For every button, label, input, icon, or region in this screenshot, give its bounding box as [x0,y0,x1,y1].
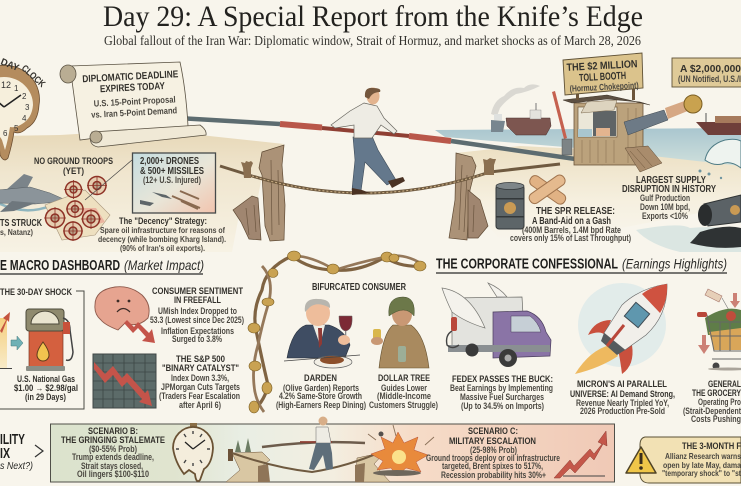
scenario b text [61,426,165,479]
largest supply disruption text [622,175,716,221]
micron caption: Revenue Nearly Tripled YoY, [576,398,669,408]
water splash [698,139,741,179]
micron caption: UNIVERSE: AI Demand Strong, [570,389,675,400]
shoes [352,188,370,195]
window [578,107,617,137]
roof [563,95,650,105]
toll booth [552,88,662,172]
left cliff face [233,145,285,241]
illustration: grocery cart [697,289,741,370]
largest supply disruption text: Gulf Production [640,193,690,203]
scenario b text: Oil lingers $100-$110 [77,469,149,479]
melting clock: 1 [14,84,19,93]
consumer sentiment text [150,286,244,344]
decency strategy text: decency (while bombing Kharg Island). [98,234,226,244]
scroll: diplomatic deadline: EXPIRES TODAY [100,81,165,95]
s&p text: (Traders Fear Escalation [159,391,240,401]
head [366,88,380,104]
icon: teal arrow [11,336,23,350]
heading: macro dashboard: E MACRO DASHBOARD [0,258,120,274]
tankers and smoke [491,84,741,135]
toll booth sign [563,53,643,95]
toll booth sign: (Hormuz Chokepoint) [569,80,639,94]
spr text [510,206,631,243]
scenario c text: Recession probability hits 30%+ [441,470,546,480]
spr text: A Band-Aid on a Gash [532,216,611,227]
scroll: diplomatic deadline [60,62,206,147]
volatility matrix heading [0,432,43,472]
consumer sentiment text: Inflation Expectations [161,326,234,336]
arm paying with coin [624,95,702,135]
s&p text: after April 6) [179,400,221,410]
title: Day 29: A Special Report from the Knife’s Edge [103,0,643,33]
darden caption: 4.2% Same-Store Growth [279,391,362,401]
pump caption [14,374,78,402]
micron caption: MICRON'S AI PARALLEL [577,379,667,390]
micron caption [570,379,675,416]
melting clock: 3 [25,103,30,112]
largest supply disruption text: Exports <10% [642,211,688,221]
jet [0,174,68,212]
decency strategy text: The "Decency" Strategy: [119,216,207,226]
scenario b text: ($0-55% Prob) [89,444,137,454]
consumer sentiment text: Surged to 3.8% [172,334,222,344]
rope bridge [220,158,560,193]
scenario c text: targeted, Brent spixes to 517%, [442,461,543,471]
consumer sentiment text: 53.3 (Lowest since Dec 2025) [150,315,244,325]
decency strategy text: Spare oil infrastructure for reasons of [100,225,225,235]
sites struck text: s, Natanz) [0,227,33,237]
balancing pole [152,116,603,163]
scenario c text: SCENARIO C: [468,426,518,437]
panel: 30-day shock: THE 30-DAY SHOCK [0,287,72,298]
consumer sentiment text: CONSUMER SENTIMENT [152,286,243,296]
icon: gas pump [26,309,73,371]
crate [625,146,662,172]
jeans [352,136,396,191]
panel: drones and missiles [85,153,216,213]
melting clock: 2 [22,92,27,101]
largest supply disruption text: Down 10M bpd, [640,202,690,212]
fedex caption: Beat Earnings by Implementing [450,383,553,393]
scenario b text: THE GRINGING STALEMATE [61,435,165,446]
man on tightrope [331,88,405,195]
sea [435,128,741,166]
bar chart fragment [0,312,12,368]
fedex caption [450,374,553,411]
fedex caption: Massive Fuel Surcharges [460,392,544,402]
icon: warning triangle [626,447,656,473]
dollar tree caption: DOLLAR TREE [378,373,430,384]
dollar tree caption: (Middle-Income [377,391,431,401]
spr text: (400M Barrels, 1.4M bpd Rate [522,225,621,235]
heading: macro dashboard: (Market Impact) [124,257,204,273]
fedex caption: (Up to 34.5% on Imports) [461,401,544,411]
middle landscape [226,438,390,482]
hair [365,88,380,99]
s&p text: JPMorgan Cuts Targets [161,382,240,392]
largest supply disruption text: LARGEST SUPPLY [636,175,706,186]
consumer sentiment text: UMish Index Dropped to [158,306,237,316]
callout text [662,441,741,478]
s&p chart [93,354,156,408]
shirt [331,103,397,138]
panel: drones and missiles: 2,000+ DRONES [140,156,199,167]
callout: 3-month warning [626,437,741,483]
pump caption: $1.00 → $2.98/gal [14,383,78,393]
scenario c text: Ground troops deploy or oil infrastructure [426,453,560,463]
panel: 30-day shock [0,287,84,409]
no ground troops label: (YET) [63,166,84,177]
scroll body: U.S. 15-Point Proposal [93,94,176,109]
scenario b text: Trump extends deadline, [72,452,154,462]
second sign: A $2,000,000 [680,63,741,75]
illustration: fedex winged truck [442,283,551,367]
no ground troops label [34,156,113,177]
consumer sentiment text: IN FREEFALL [174,295,221,305]
s&p text: THE S&P 500 [176,354,225,364]
map with target markers [44,176,110,241]
scroll: diplomatic deadline: vs. Iran 5-Point Demand [91,105,177,120]
second sign [672,58,741,87]
melting clock: 12 [1,80,11,90]
pump caption: U.S. National Gas [17,374,75,384]
dollar tree caption: Guides Lower [381,383,427,393]
scenario c text: MILITARY ESCALATION [449,436,536,447]
no ground troops label: NO GROUND TROOPS [34,156,113,167]
scenario b text: SCENARIO B: [88,426,138,437]
sites struck text [0,218,43,237]
decency strategy text [98,216,226,253]
sites struck text: TS STRUCK [0,218,43,229]
clock heading word: CLOCK [19,63,47,90]
melting clock: 6 [3,129,8,138]
scenario c text [426,426,560,480]
darden caption: (Olive Garden) Reports [283,383,359,393]
melting clock: 4 [22,114,27,123]
toll booth sign: TOLL BOOTH [579,70,626,84]
panel: scenarios strip [50,416,614,482]
volatility matrix heading: ILITY [0,432,25,448]
fedex caption: FEDEX PASSES THE BUCK: [452,374,553,385]
panel: drones and missiles: & 500+ MISSILES [140,166,204,177]
melting clock [0,65,40,160]
awning [581,100,617,113]
volatility matrix heading: IX [0,446,10,462]
barrier arm [552,91,567,139]
spilled barrel and oil [636,195,741,252]
panel: drones and missiles: (12+ U.S. Injured) [143,175,201,185]
scroll headline: DIPLOMATIC DEADLINE [82,69,179,85]
icon: crossed band-aids [527,173,568,206]
right cliff face [449,153,488,240]
bifurcated consumer label: BIFURCATED CONSUMER [312,282,407,293]
right stake [483,158,496,175]
icon: explosion [368,425,434,476]
rope frame with coins [248,251,426,413]
toll booth sign: THE $2 MILLION [566,58,638,74]
melting clock: 5 [14,124,19,133]
scenario b text: Strait stays closed, [81,461,143,471]
illustration: rocket [575,283,667,374]
micron caption: 2026 Production Pre-Sold [580,406,665,416]
spr text: THE SPR RELEASE: [536,206,615,217]
heading: corporate confessional: THE CORPORATE CONFESSIONAL [436,256,618,272]
s&p text: "BINARY CATALYST" [162,363,239,373]
s&p text [159,354,240,410]
scenario c text: (25-98% Prob) [470,445,517,455]
spr barrel [496,182,524,229]
booth walls [574,103,643,165]
mini tightrope walker [262,416,365,470]
icon: sad brain [95,287,155,343]
volatility matrix heading: s Next?) [0,460,33,472]
right ground [456,146,741,240]
general mills caption [683,379,741,424]
left ground [0,132,284,252]
dollar tree caption: Customers Struggle) [369,400,438,410]
icon: melting stopwatch [173,423,213,481]
darden caption: (High-Earners Reep Dining) [276,400,366,410]
icon: rising red arrow [554,431,607,478]
dollar tree caption [369,373,438,410]
illustration: dollar tree shopper [371,297,429,368]
pump caption: (in 29 Days) [25,392,66,402]
illustration: darden diner [284,299,360,368]
decency strategy text: (90% of Iran's oil exports). [120,243,205,253]
subtitle: Global fallout of the Iran War: Diplomatic window, Strait of Hormuz, and market shocks as of March 28, 2026 [104,34,641,49]
darden caption: DARDEN [304,373,337,384]
largest supply disruption text: DISRUPTION IN HISTORY [622,184,716,195]
darden caption [276,373,366,410]
panel: tightrope scene background [0,128,741,252]
left stake [241,161,253,178]
s&p text: Index Down 3.3%, [171,373,229,383]
spr text: covers only 15% of Last Throughput) [510,233,631,243]
